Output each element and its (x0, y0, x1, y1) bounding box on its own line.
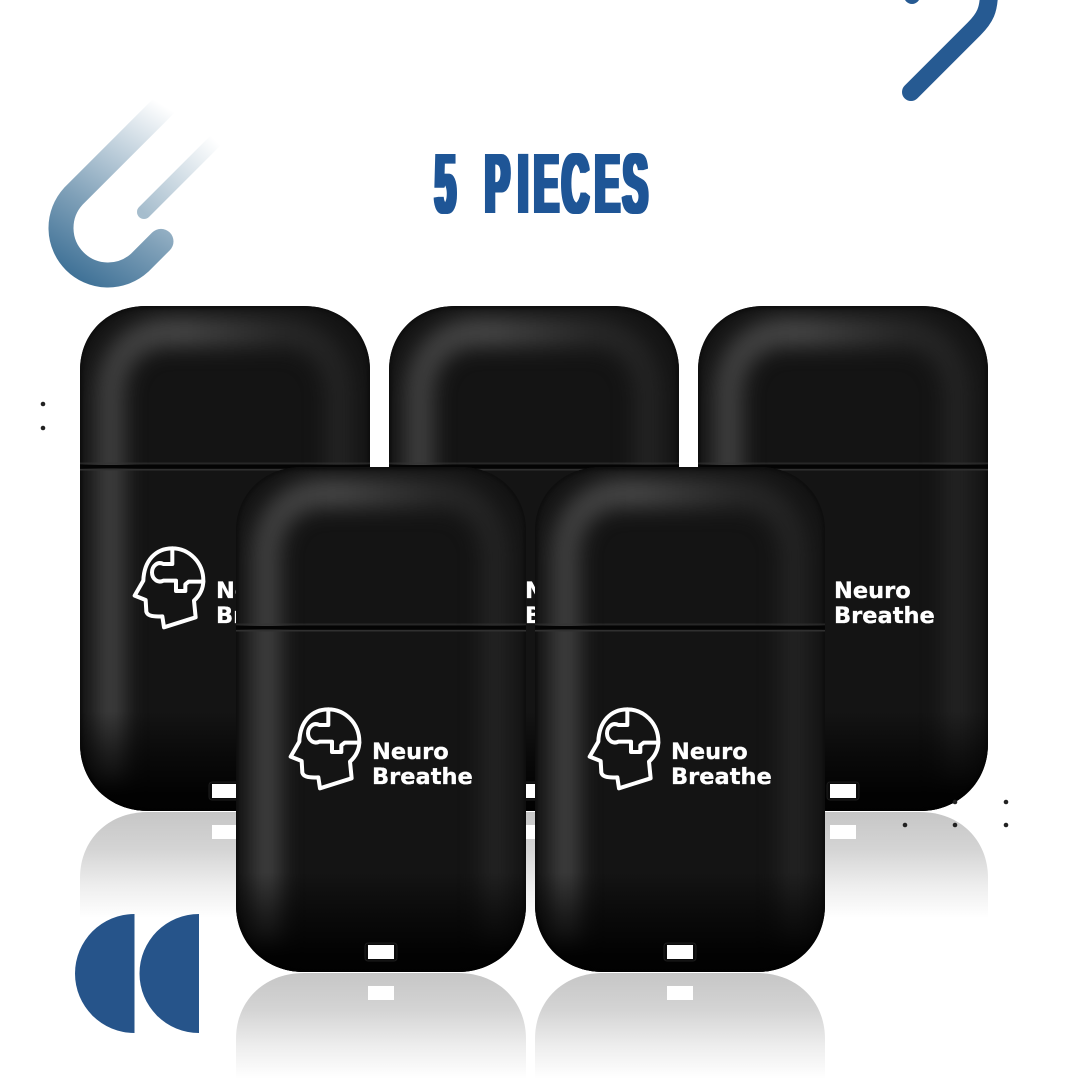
device: front right: Breathe (671, 764, 772, 790)
decoration: blue half circles (75, 914, 199, 1033)
device: front left: Neuro (372, 739, 449, 765)
decoration: faded blue hook, top left (61, 100, 218, 275)
device: back right: Breathe (834, 603, 935, 629)
title: 5 PIECES (435, 136, 648, 231)
device: back left: Neuro (216, 578, 293, 604)
device: front left: Breathe (372, 764, 473, 790)
decoration: dots, right (903, 800, 1008, 827)
device: back left (80, 306, 370, 811)
reflections: back row (80, 812, 988, 918)
device: back right: Neuro (834, 578, 911, 604)
reflections: front row (236, 973, 825, 1079)
device: front right (535, 467, 825, 972)
decoration: blue hook, top right (904, 0, 989, 92)
device: front right: Neuro (671, 739, 748, 765)
device: back middle: Neuro (525, 578, 602, 604)
device: back middle: Breathe (525, 603, 626, 629)
device: back left: Breathe (216, 603, 317, 629)
device: back right (698, 306, 988, 811)
device: front left (236, 467, 526, 972)
device: back middle (389, 306, 679, 811)
decoration: dots, left (41, 402, 45, 430)
